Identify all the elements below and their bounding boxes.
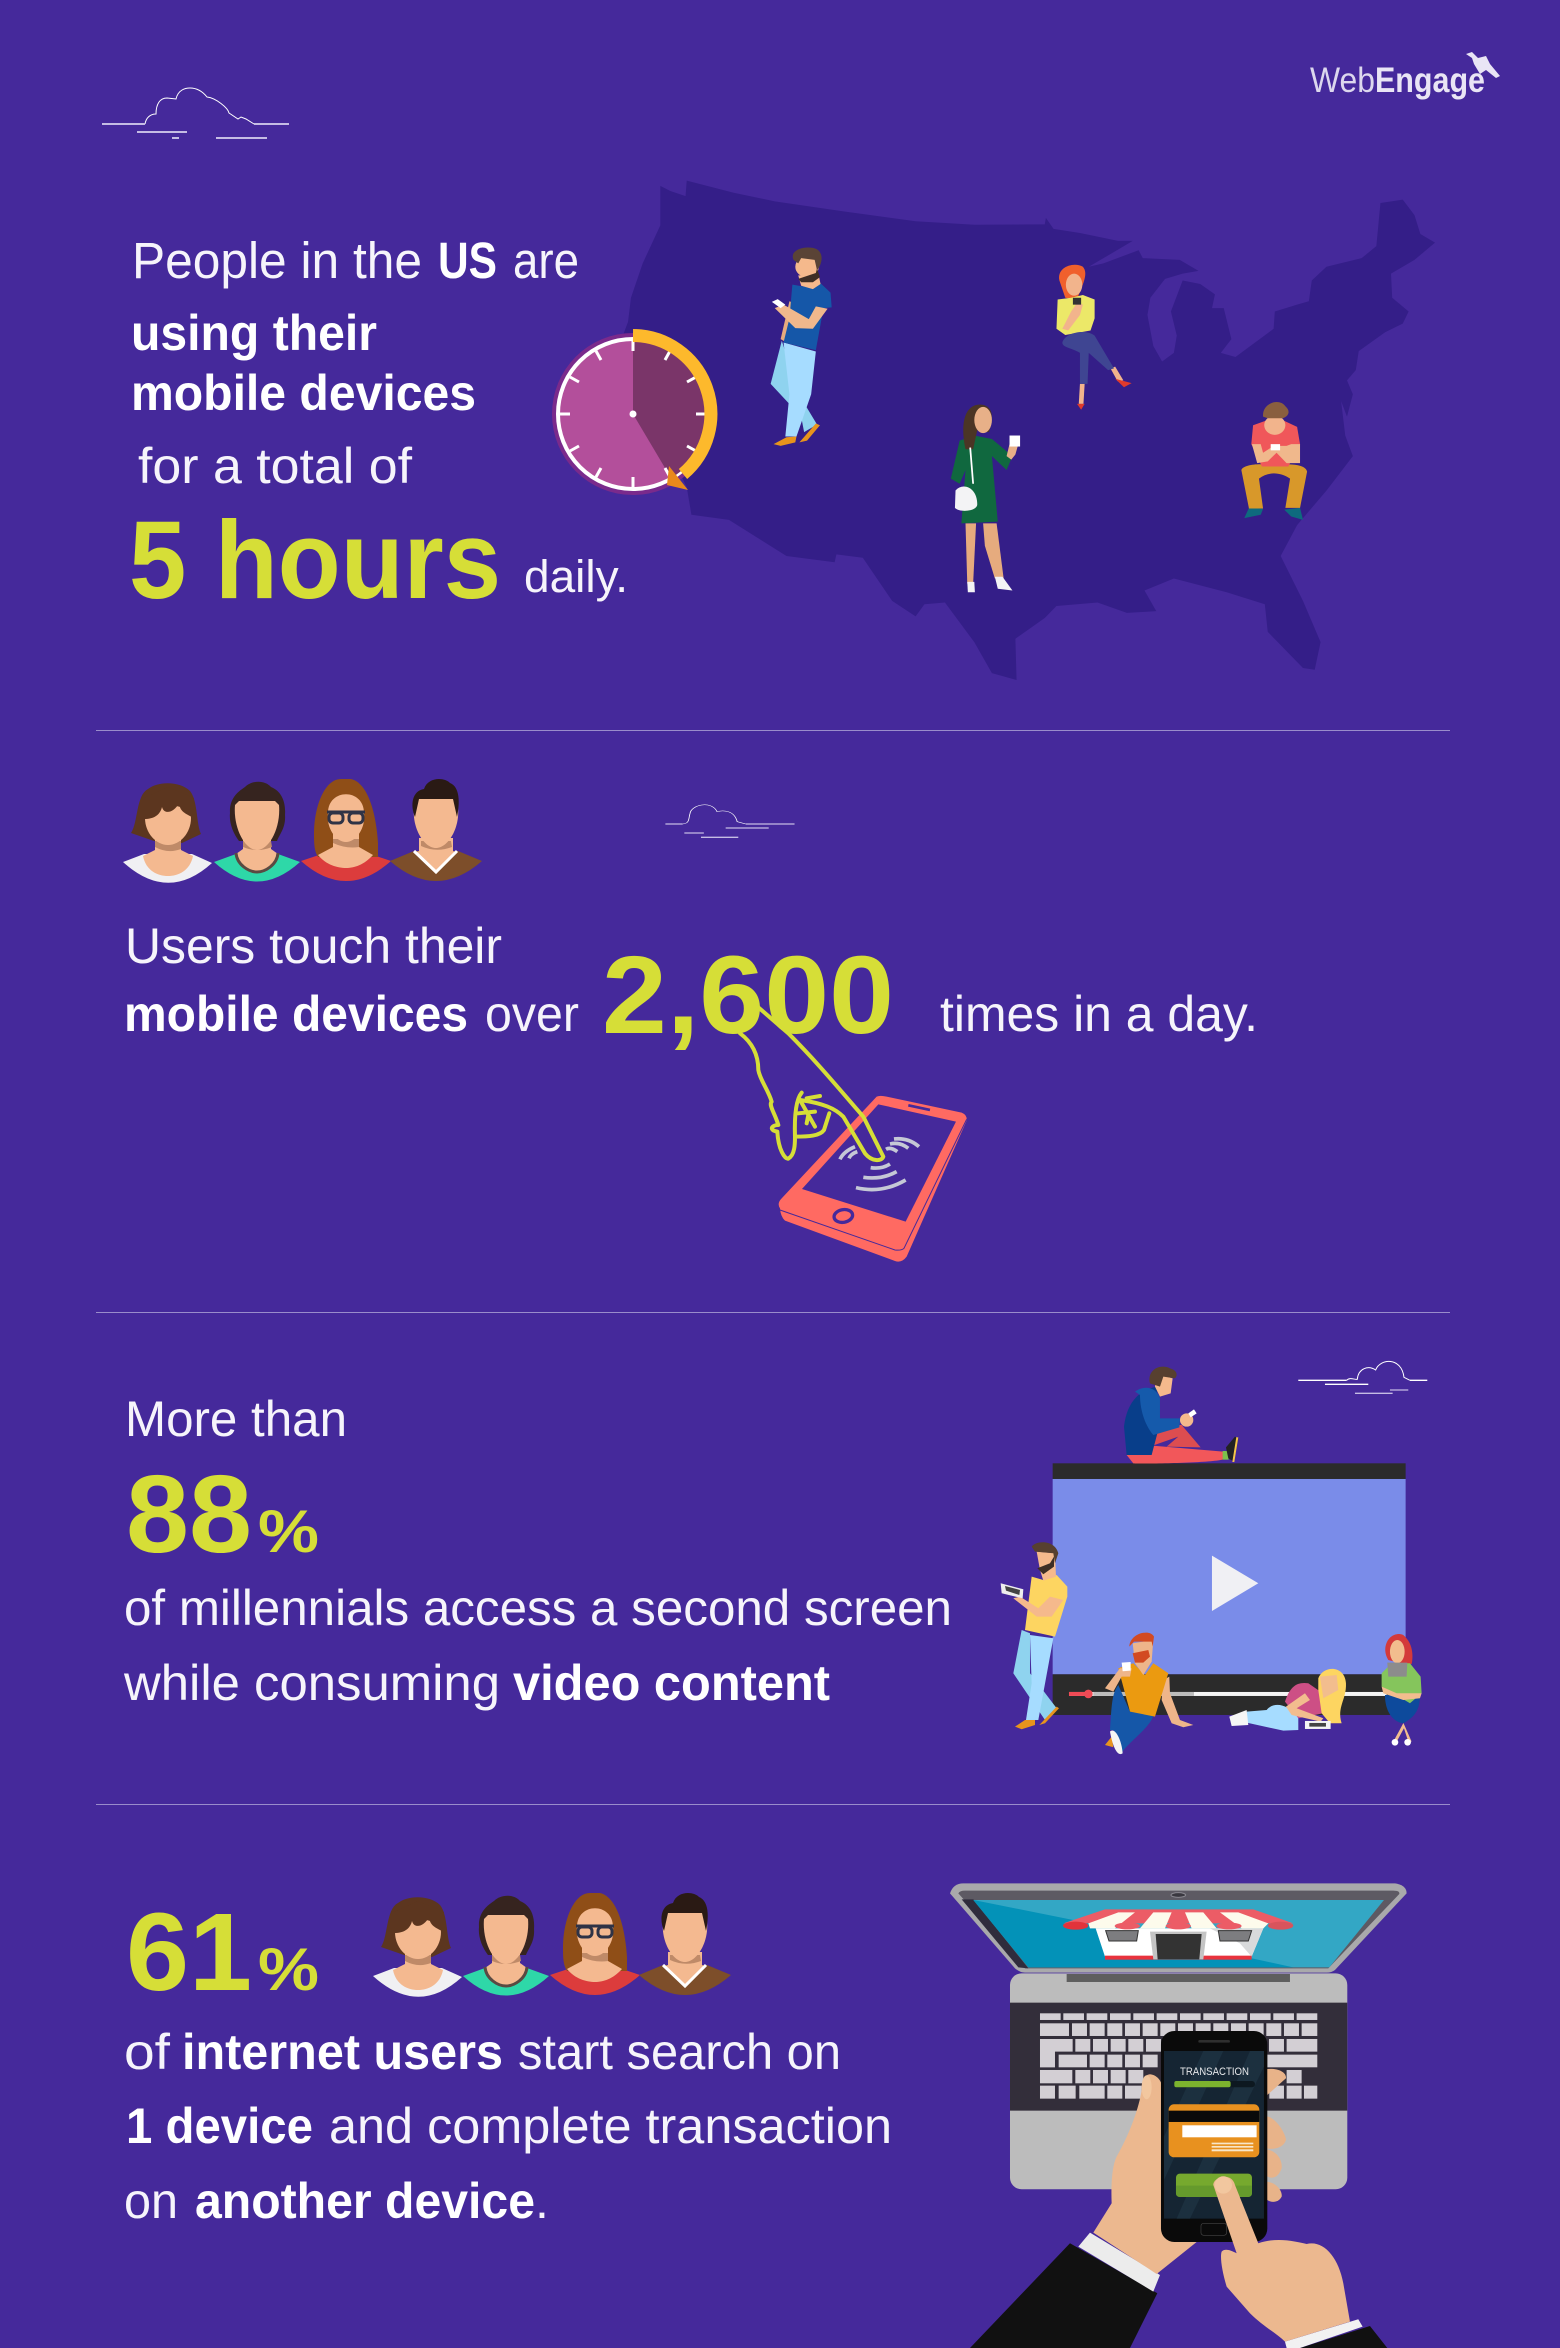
text block: intro: are (513, 232, 579, 289)
phone (1161, 2031, 1267, 2242)
text block: millennials (123, 1580, 952, 1711)
person: man in orange shirt (1105, 1633, 1193, 1754)
person: woman lying down (1229, 1669, 1346, 1731)
right sleeve and hand (1213, 2176, 1387, 2348)
laptop lid (950, 1883, 1407, 1973)
text block: internet users: another device (195, 2173, 535, 2229)
laptop base and keyboard (1010, 1973, 1347, 2189)
avatars: group of four (373, 1893, 731, 1997)
text block: users touch: mobile devices (124, 986, 468, 1042)
logo: WebEngage: Engage (1375, 61, 1485, 100)
text block: millennials: while consuming (123, 1655, 500, 1711)
stat: 5 hours daily: 5 hours (129, 499, 501, 622)
text block: internet users: and complete transaction (329, 2098, 892, 2154)
shop on screen (1063, 1909, 1293, 1960)
person: man in red shirt (1241, 402, 1307, 520)
illustration: laptop and phone (950, 1883, 1407, 2348)
text block: internet users: internet users (182, 2024, 503, 2080)
text block: internet users (124, 2024, 892, 2229)
icon: hand tapping phone (740, 1007, 967, 1262)
stat: 61%: 61 (126, 1891, 252, 2014)
text block: intro: mobile devices (131, 365, 476, 421)
text block: internet users: of (124, 2024, 170, 2080)
text block: internet users: on (124, 2173, 178, 2229)
panel: US mobile usage (129, 181, 1435, 680)
logo: WebEngage: Web (1310, 61, 1375, 100)
person: woman with tablet (1382, 1634, 1422, 1746)
text block: millennials: of millennials access a second screen (124, 1580, 952, 1636)
stat: 61%: % (258, 1936, 319, 2003)
text block: internet users: start search on (518, 2024, 841, 2080)
text: more than: More than (125, 1391, 347, 1447)
illustration: video player and people (1001, 1361, 1427, 1754)
divider (96, 730, 1450, 731)
cloud: section two (665, 805, 795, 837)
stat: 88% (126, 1453, 319, 1576)
text block: intro: for a total of (138, 438, 412, 494)
text block: internet users: 1 device (126, 2098, 313, 2154)
person: woman in green dress (951, 405, 1020, 592)
divider (96, 1312, 1450, 1313)
stat: 61% (126, 1891, 319, 2014)
text block: intro (131, 232, 579, 494)
left sleeve and hand (970, 2069, 1286, 2348)
person: man in blue shirt (771, 247, 832, 446)
people on the map (771, 247, 1307, 592)
text: times in a day: times in a day. (940, 986, 1258, 1042)
text block: millennials: video content (513, 1655, 830, 1711)
person: man in hoodie (1124, 1367, 1238, 1463)
panel: second screen (123, 1361, 1427, 1754)
person: woman in yellow top (1056, 265, 1132, 410)
text block: intro: using their (131, 305, 377, 361)
stat: 2,600: 2,600 (602, 934, 894, 1057)
map: United States (616, 181, 1435, 680)
stat: 88%: 88 (126, 1453, 252, 1576)
video player (1053, 1463, 1406, 1715)
icon: clock (552, 333, 714, 495)
logo: WebEngage (1310, 52, 1500, 100)
cloud: section three (1298, 1361, 1427, 1393)
divider (96, 1804, 1450, 1805)
panel: touches per day (123, 779, 1258, 1262)
text block: intro: People in the (132, 232, 422, 289)
credit card (1169, 2104, 1259, 2157)
stat: 5 hours daily: daily. (524, 551, 628, 602)
cloud: top left (102, 88, 289, 138)
person: man in yellow shirt (1001, 1542, 1067, 1729)
stat: 88%: % (258, 1498, 319, 1565)
text block: users touch: Users touch their (125, 918, 502, 974)
text block: users touch (124, 918, 579, 1042)
text block: intro: US (438, 232, 497, 289)
panel: cross-device (124, 1883, 1407, 2348)
text: transaction: TRANSACTION (1180, 2066, 1249, 2078)
text block: users touch: over (485, 986, 579, 1042)
icon: logo bird (1466, 52, 1500, 78)
text block: internet users: . (535, 2173, 549, 2229)
avatars: group of four (123, 779, 482, 883)
